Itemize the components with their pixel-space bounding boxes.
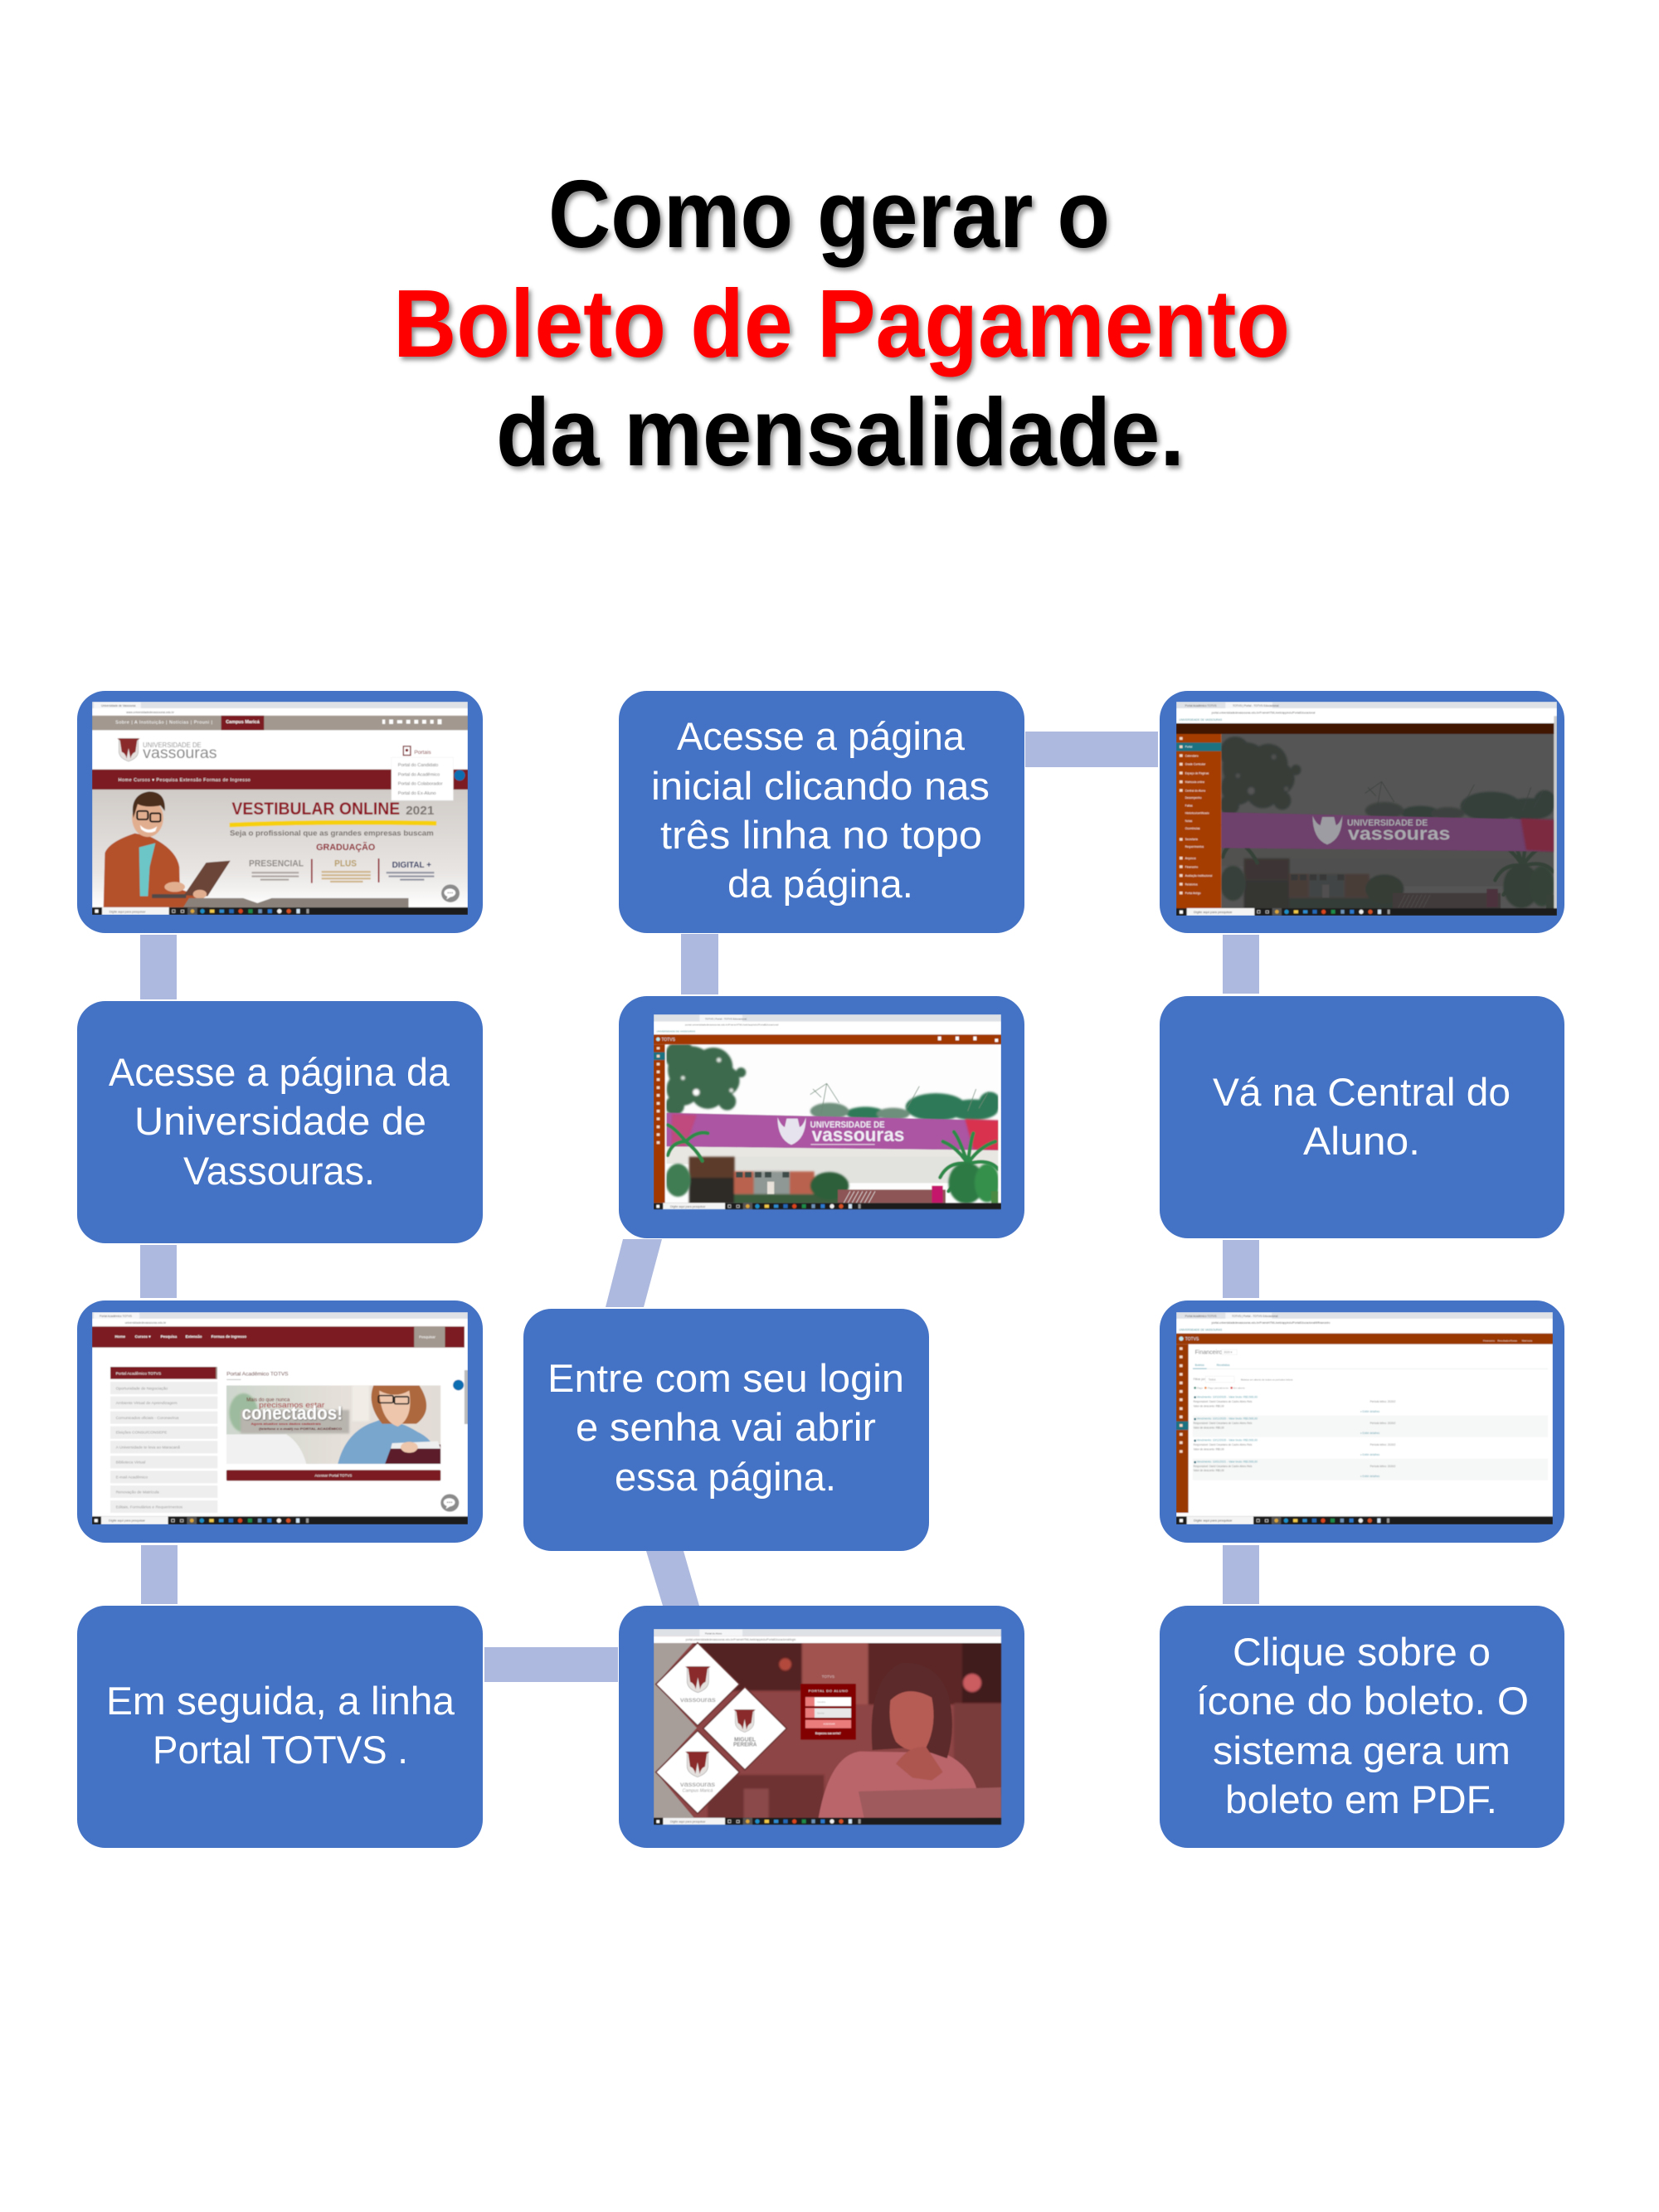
panel: step 12 text card: ícone do boleto. O — [1196, 1679, 1529, 1723]
panel: step 12 text card: Clique sobre o — [1233, 1630, 1491, 1674]
screenshot: financeiro boletos: Financeiro — [1483, 1339, 1495, 1342]
screenshot: university home page: Sobre | A Instituição | Notícias | Prouni | — [115, 721, 212, 726]
screenshot: totvs dark overlay with menu — [1176, 702, 1557, 916]
screenshot: portal do aluno login: Portal do Aluno — [705, 1631, 722, 1635]
banner: conectados: conectados! — [242, 1403, 343, 1423]
sidebar menu: Eleições CONSU/CONSEPE — [116, 1431, 167, 1436]
dropdown: portais menu — [392, 757, 453, 800]
menu: sidebar expanded: Calendário — [1185, 754, 1199, 757]
panel: step 6 text card: Entre com seu login — [547, 1356, 904, 1400]
content: boletos list: Boletos em aberto de todos os períodos letivos — [1241, 1378, 1293, 1382]
banner text: vestibular online: PLUS — [334, 859, 357, 868]
content: boletos list: ▾ Exibir detalhes — [1360, 1432, 1380, 1435]
panel: step 1 screenshot card — [77, 691, 483, 933]
panel: step 8 text card — [619, 691, 1024, 933]
menu: sidebar expanded: Financeiro — [1185, 865, 1198, 868]
screenshot: totvs dark overlay with menu: TOTVS | Portal - TOTVS Educacional — [1233, 704, 1279, 707]
menu: sidebar expanded: Ocorrências — [1185, 827, 1200, 830]
sign: universidade de vassouras — [777, 1117, 904, 1145]
banner text: vestibular online: VESTIBULAR ONLINE — [231, 800, 400, 819]
panel: step 5 login screenshot card — [619, 1606, 1024, 1848]
content: boletos list: Pago parcialmente — [1208, 1386, 1228, 1389]
screenshot: portal academico page: Pesquisar — [419, 1335, 435, 1339]
content: boletos list: Valor de desconto: R$0,00 — [1194, 1426, 1224, 1429]
screenshot: portal do aluno login: Digite aqui para pesquisar — [670, 1821, 706, 1824]
banner text: vestibular online — [230, 800, 436, 883]
panel: step 8 text card: inicial clicando nas — [651, 764, 990, 808]
screenshot: financeiro boletos: Portal Acadêmico TOTVS — [1185, 1315, 1217, 1318]
panel: step 9 expanded menu screenshot card — [1160, 691, 1564, 933]
panel: step 6 text card: e senha vai abrir — [576, 1405, 876, 1449]
screenshot: university home page: vassouras — [143, 744, 217, 762]
content: boletos list: Responsável: David Cesariano de Castro Abreu Reis — [1194, 1422, 1253, 1425]
dropdown: portais menu: Portal do Candidato — [398, 763, 438, 768]
content: boletos list: Período letivo: 2020/2 — [1370, 1465, 1396, 1468]
screenshot: university home page: Digite aqui para pesquisar — [109, 910, 146, 913]
menu: sidebar expanded: Desempenho — [1185, 796, 1202, 800]
dropdown: portais menu: Portal do Acadêmico — [398, 773, 440, 777]
menu: sidebar expanded: Requerimentos — [1185, 845, 1204, 848]
menu: sidebar expanded: Portal — [1185, 746, 1193, 749]
screenshot: totvs home collapsed menu: TOTVS | Portal - TOTVS Educacional — [705, 1017, 747, 1020]
screenshot: totvs home collapsed menu: TOTVS — [661, 1038, 676, 1043]
screenshot: university home page: Portais — [414, 750, 431, 756]
menu: sidebar expanded: Avaliação institucional — [1185, 874, 1213, 878]
panel: step 12 text card: sistema gera um — [1213, 1728, 1511, 1772]
login box: Usuário — [817, 1700, 826, 1704]
content: boletos list: Período letivo: 2020/2 — [1370, 1422, 1396, 1425]
content: boletos list: ▾ Exibir detalhes — [1360, 1453, 1380, 1456]
logos: three diamonds — [656, 1643, 786, 1814]
banner text: vestibular online: PRESENCIAL — [249, 859, 304, 868]
sidebar menu — [110, 1367, 217, 1513]
sign: universidade de vassouras: UNIVERSIDADE DE — [1347, 819, 1428, 829]
menu: sidebar expanded: Arquivos — [1185, 857, 1196, 860]
menu: sidebar expanded: Matrícula online — [1185, 780, 1204, 784]
content: boletos list: Vencimento: 10/11/2020 - Valor bruto: R$3.500,00 — [1197, 1417, 1258, 1421]
sidebar menu: Oportunidade de Negociação — [116, 1386, 168, 1391]
panel: step 6 text card: essa página. — [615, 1455, 836, 1499]
logos: three diamonds: PEREIRA — [733, 1743, 757, 1748]
screenshot: university home page: www.universidadedevassouras.edu.br — [126, 711, 175, 714]
panel: step 8 text card: três linha no topo — [660, 813, 982, 857]
panel: step 2 text card — [77, 1001, 483, 1243]
banner: conectados: (telefone e e-mail) no PORTAL ACADÊMICO — [259, 1427, 342, 1431]
screenshot: portal academico page: Pesquisa — [161, 1334, 178, 1339]
panel: step 2 text card: Acesse a página da — [109, 1050, 450, 1094]
panel: step 7 campus screenshot card — [619, 996, 1024, 1238]
login box — [800, 1684, 856, 1740]
screenshot: university home page: Home Cursos ▾ Pesquisa Extensão Formas de Ingresso — [119, 778, 251, 783]
content: boletos list: Financeiro: — [1195, 1350, 1224, 1356]
screenshot: portal academico page: Portal Acadêmico TOTVS — [226, 1372, 289, 1378]
panel: step 8 text card: da página. — [727, 862, 913, 906]
panel: step 3 screenshot card — [77, 1300, 483, 1543]
panel: step 12 text card — [1160, 1606, 1564, 1848]
menu: sidebar expanded: Portal Antigo — [1185, 892, 1201, 895]
panel: step 10 text card: Aluno. — [1303, 1119, 1420, 1163]
menu: sidebar expanded: Faltas — [1185, 804, 1193, 807]
screenshot: university home page — [92, 702, 468, 915]
sign: universidade de vassouras: UNIVERSIDADE DE — [810, 1121, 885, 1130]
panel: step 2 text card: Universidade de — [134, 1099, 426, 1143]
screenshot: financeiro boletos: portal.universidadedevassouras.edu.br/FrameHTML/web/app/edu/PortalEducacional/#/financeiro — [1212, 1321, 1331, 1325]
content: boletos list — [1193, 1349, 1548, 1480]
login box: ACESSAR — [823, 1723, 836, 1726]
sidebar menu: Portal Acadêmico TOTVS — [116, 1371, 161, 1376]
screenshot: university home page: UNIVERSIDADE DE — [143, 741, 202, 749]
login box: Senha — [817, 1711, 825, 1714]
screenshot: totvs home collapsed menu: portal.universidadedevassouras.edu.br/FrameHTML/web/app/edu/PortalEducacional — [685, 1023, 779, 1027]
screenshot: university home page: Universidade de Vassouras — [101, 704, 136, 707]
screenshot: financeiro boletos: UNIVERSIDADE DE VASSOURAS — [1179, 1329, 1223, 1332]
title: Boleto de Pagamento — [393, 270, 1290, 377]
sign: universidade de vassouras — [1312, 815, 1450, 844]
sidebar menu: Comunicados oficiais - Coronavírus — [116, 1416, 179, 1421]
login box: PORTAL DO ALUNO — [809, 1689, 848, 1693]
screenshot: totvs home collapsed menu: Digite aqui para pesquisar — [670, 1205, 706, 1208]
screenshot: portal academico page: universidadedevassouras.edu.br — [125, 1321, 167, 1325]
login box: Esqueceu sua senha? — [815, 1732, 841, 1735]
panel: step 6 text card — [523, 1309, 929, 1551]
content: boletos list: Período letivo: 2020/2 — [1370, 1443, 1396, 1446]
screenshot: portal academico page: Digite aqui para pesquisar — [109, 1519, 146, 1523]
content: boletos list: Responsável: David Cesariano de Castro Abreu Reis — [1194, 1465, 1253, 1468]
illustration: student woman — [819, 1663, 1001, 1818]
sidebar menu: Ambiente Virtual de Aprendizagem — [116, 1401, 178, 1406]
banner: conectados: Agora atualize seus dados cadastrais — [251, 1422, 321, 1426]
content: boletos list: Boletos — [1195, 1364, 1204, 1367]
sidebar menu: Biblioteca Virtual — [116, 1460, 145, 1465]
screenshot: portal academico page: Home — [115, 1334, 126, 1339]
content: boletos list: Valor de desconto: R$0,00 — [1194, 1447, 1224, 1451]
banner: conectados: precisamos estar — [259, 1401, 324, 1410]
dropdown: portais menu: Portal do Colaborador — [398, 782, 443, 787]
screenshot: portal academico page: Acessar Portal TOTVS — [314, 1474, 352, 1478]
screenshot: totvs dark overlay with menu: Digite aqui para pesquisar — [1194, 910, 1233, 914]
sidebar menu: Renovação de Matrícula — [116, 1490, 159, 1495]
screenshot: totvs dark overlay with menu: UNIVERSIDADE DE VASSOURAS — [1179, 718, 1223, 722]
content: boletos list: Vencimento: 10/01/2021 - Valor bruto: R$3.500,00 — [1197, 1461, 1258, 1464]
logos: three diamonds: MIGUEL — [734, 1737, 757, 1743]
content: boletos list: Valor de desconto: R$0,00 — [1194, 1469, 1224, 1472]
sidebar menu: E-mail Acadêmico — [116, 1475, 148, 1480]
screenshot: portal academico page: Formas de Ingresso — [212, 1334, 246, 1339]
screenshot: portal academico page — [92, 1312, 468, 1524]
banner: conectados — [226, 1385, 441, 1465]
screenshot: portal do aluno login: portal.universidadedevassouras.edu.br/FrameHTML/web/app/edu/PortalEducacional/login — [686, 1638, 795, 1641]
screenshot: totvs home collapsed menu: UNIVERSIDADE DE VASSOURAS — [656, 1029, 695, 1033]
screenshot: financeiro boletos: Digite aqui para pesquisar — [1194, 1519, 1233, 1523]
content: boletos list: Vencimento: 10/10/2020 - Valor bruto: R$3.500,00 — [1197, 1396, 1258, 1399]
banner: conectados: Mais do que nunca — [246, 1397, 290, 1403]
panel: step 4 text card: Em seguida, a linha — [106, 1679, 455, 1723]
sidebar menu: A Universidade te leva ao Maracanã — [116, 1446, 180, 1451]
screenshot: financeiro boletos: Resultados/Notas — [1497, 1339, 1518, 1342]
screenshot: portal do aluno login — [654, 1629, 1004, 1825]
screenshot: portal do aluno login: TOTVS — [822, 1675, 834, 1679]
logos: three diamonds: Campus Maricá — [683, 1789, 713, 1794]
panel: step 4 text card — [77, 1606, 483, 1848]
screenshot: financeiro boletos: Matrícula — [1522, 1339, 1532, 1342]
screenshot: portal academico page: Portal Acadêmico TOTVS — [100, 1315, 133, 1318]
screenshot: financeiro boletos: TOTVS | Portal - TOTVS Educacional — [1232, 1315, 1278, 1318]
content: boletos list: ▾ Exibir detalhes — [1360, 1410, 1380, 1413]
content: boletos list: Pago — [1197, 1386, 1203, 1389]
menu: sidebar expanded: Relatórios — [1185, 882, 1198, 886]
sidebar menu: Editais, Formulários e Requerimentos — [116, 1505, 183, 1510]
banner text: vestibular online: GRADUAÇÃO — [316, 842, 375, 853]
screenshot: portal academico page: Extensão — [186, 1334, 202, 1339]
illustration: student with laptop — [104, 791, 231, 907]
menu: sidebar expanded: Central do Aluno — [1185, 789, 1205, 792]
content: boletos list: Vencimento: 10/12/2020 - Valor bruto: R$3.500,00 — [1197, 1439, 1258, 1442]
content: boletos list: Valor de desconto: R$0,00 — [1194, 1404, 1224, 1407]
sign: universidade de vassouras: vassouras — [1348, 824, 1450, 844]
panel: step 10 text card — [1160, 996, 1564, 1238]
panel: step 4 text card: Portal TOTVS . — [153, 1728, 408, 1772]
panel: step 8 text card: Acesse a página — [677, 714, 966, 758]
screenshot: financeiro boletos: TOTVS — [1185, 1337, 1199, 1342]
content: boletos list: Responsável: David Cesariano de Castro Abreu Reis — [1194, 1400, 1253, 1403]
title: Como gerar o — [548, 160, 1110, 268]
screenshot: financeiro boletos — [1176, 1312, 1553, 1524]
content: boletos list: Em aberto — [1233, 1386, 1245, 1389]
content: boletos list: Filtrar por: — [1194, 1378, 1206, 1381]
menu: sidebar expanded: Notas — [1185, 819, 1193, 823]
banner text: vestibular online: 2021 — [406, 804, 434, 818]
screenshot: university home page: Campus Maricá — [226, 720, 260, 725]
banner text: vestibular online: DIGITAL + — [392, 861, 431, 870]
screenshot: portal academico page: Cursos ▾ — [135, 1334, 151, 1339]
logos: three diamonds: vassouras — [680, 1780, 715, 1788]
content: boletos list: Recebidos — [1217, 1364, 1230, 1367]
panel: step 2 text card: Vassouras. — [183, 1149, 375, 1193]
logos: three diamonds: vassouras — [680, 1695, 716, 1704]
title: da mensalidade. — [496, 378, 1185, 486]
content: boletos list: Responsável: David Cesariano de Castro Abreu Reis — [1194, 1443, 1253, 1446]
title — [393, 160, 1290, 486]
arrow: flow connectors between steps — [140, 732, 1259, 1682]
sign: universidade de vassouras: vassouras — [812, 1124, 904, 1145]
menu: sidebar expanded: Histórico/certificado — [1185, 812, 1209, 815]
content: boletos list: Todos — [1209, 1378, 1216, 1381]
dropdown: portais menu: Portal do Ex-Aluno — [398, 791, 436, 796]
panel: step 11 financeiro screenshot card — [1160, 1300, 1564, 1543]
screenshot: totvs dark overlay with menu: portal.universidadedevassouras.edu.br/FrameHTML/web/app/edu/PortalEducacional — [1212, 711, 1316, 714]
banner text: vestibular online: Seja o profissional que as grandes empresas buscam — [230, 829, 434, 837]
screenshot: totvs home collapsed menu — [654, 1014, 1001, 1210]
panel: step 12 text card: boleto em PDF. — [1225, 1777, 1497, 1821]
content: boletos list: Período letivo: 2020/2 — [1370, 1400, 1396, 1403]
content: boletos list: ▾ Exibir detalhes — [1360, 1475, 1380, 1478]
menu: sidebar expanded: Secretaria — [1185, 838, 1198, 841]
menu: sidebar expanded: Espaço de Páginas — [1185, 771, 1209, 775]
content: boletos list: 2020 ▾ — [1224, 1351, 1233, 1354]
menu: sidebar expanded: Grade Curricular — [1185, 763, 1206, 766]
panel: step 10 text card: Vá na Central do — [1213, 1070, 1511, 1114]
menu: sidebar expanded — [1176, 734, 1221, 908]
screenshot: totvs dark overlay with menu: Portal Acadêmico TOTVS — [1185, 704, 1217, 707]
